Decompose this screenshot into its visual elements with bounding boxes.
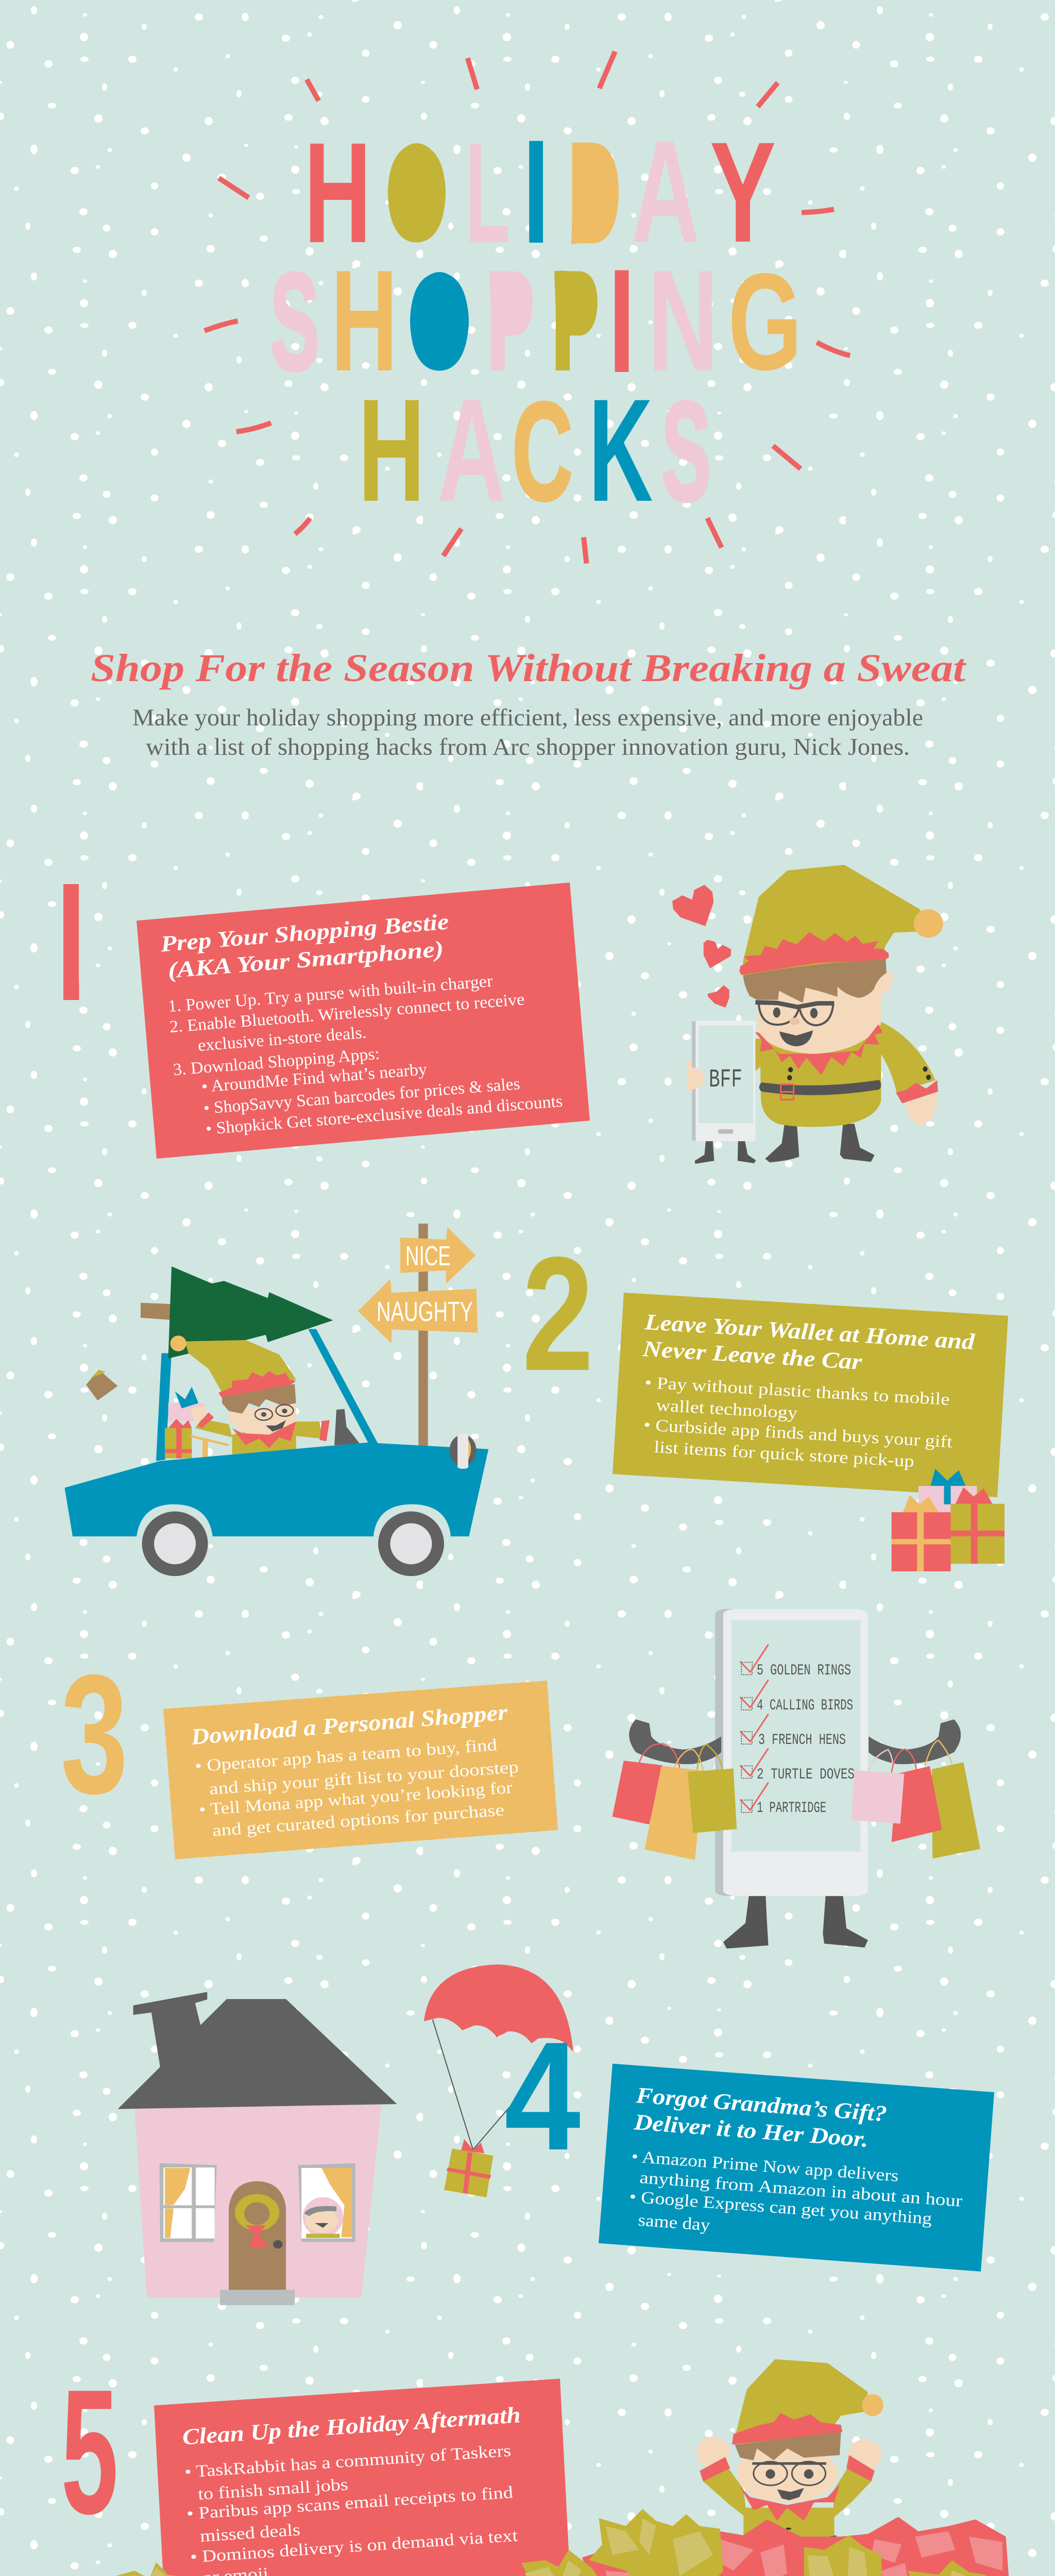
panel: step 1: Prep Your Shopping Bestie	[159, 909, 450, 957]
number 5: 5	[61, 2352, 118, 2551]
panel: step 1: 2. Enable Bluetooth. Wirelessly connect to receive	[169, 990, 525, 1037]
panel: step 2: wallet technology	[656, 1396, 798, 1422]
phone label: BFF	[709, 1065, 742, 1095]
panel: step 5: • Dominos delivery is on demand via text	[190, 2527, 518, 2567]
title: D	[567, 111, 622, 274]
icon: hearts	[672, 885, 731, 1008]
panel: step 1: • Shopkick Get store-exclusive deals and discounts	[205, 1092, 563, 1139]
panel: step 2: Never Leave the Car	[641, 1336, 863, 1375]
confetti pile with elf	[94, 2359, 1009, 2576]
icon: house	[118, 1992, 397, 2305]
sign text: NICE	[405, 1241, 451, 1272]
panel: step 4: Deliver it to Her Door.	[633, 2109, 870, 2152]
panel: step 1: (AKA Your Smartphone)	[167, 936, 445, 983]
sign text: NAUGHTY	[377, 1296, 473, 1327]
panel: step 3: and ship your gift list to your doorstep	[209, 1758, 519, 1799]
icon: olive paper clumps	[505, 2509, 987, 2576]
checklist text: 3 FRENCH HENS	[758, 1732, 846, 1749]
panel: step 2: Leave Your Wallet at Home and	[643, 1309, 976, 1354]
intro text: with a list of shopping hacks from Arc shopper innovation guru, Nick Jones.	[146, 734, 910, 760]
panel: step 4: • Amazon Prime Now app delivers	[631, 2147, 899, 2185]
title: N	[648, 240, 719, 401]
panel: step 5: • TaskRabbit has a community of Taskers	[184, 2442, 512, 2482]
panel: step 5: missed deals	[199, 2521, 301, 2546]
icon: car body	[64, 1443, 488, 1536]
title: O	[385, 116, 449, 270]
title: I	[523, 109, 550, 275]
number 3: 3	[60, 1639, 128, 1829]
panel: step 4: anything from Amazon in about an hour	[639, 2168, 963, 2211]
panel: step 2	[612, 1293, 1008, 1497]
title: S	[661, 374, 711, 530]
title: O	[407, 245, 472, 399]
panel: step 3: and get curated options for purchase	[212, 1801, 505, 1840]
title: S	[270, 245, 319, 399]
title: K	[589, 368, 653, 532]
panel: step 1: • AroundMe Find what’s nearby	[201, 1060, 428, 1096]
car scene	[64, 1224, 488, 1576]
panel: step 4: same day	[637, 2211, 711, 2235]
icon: left crumpled paper	[94, 2562, 192, 2576]
panel: step 3: Download a Personal Shopper	[190, 1700, 509, 1750]
title: H	[358, 369, 425, 532]
panel: step 4: • Google Express can get you anything	[628, 2188, 932, 2228]
panel: step 3: • Tell Mona app what you’re looking for	[198, 1778, 513, 1819]
title	[270, 109, 802, 532]
panel: step 3: • Operator app has a team to buy, find	[194, 1736, 498, 1776]
panel: step 1: 1. Power Up. Try a purse with built-in charger	[167, 972, 494, 1016]
title: H	[331, 240, 398, 401]
panel: step 1: 3. Download Shopping Apps:	[173, 1045, 380, 1079]
icon: gift stack	[892, 1469, 1005, 1571]
panel: step 1: • ShopSavvy Scan barcodes for prices & sales	[203, 1075, 521, 1118]
panel: step 3	[163, 1681, 558, 1859]
elf body	[743, 2507, 835, 2555]
panel: step 2: list items for quick store pick-up	[654, 1438, 915, 1471]
title: Y	[710, 112, 776, 272]
subtitle: Shop For the Season Without Breaking a Sweat	[91, 647, 967, 690]
house with parachute	[118, 1964, 573, 2305]
intro text	[132, 704, 923, 760]
checklist text	[757, 1662, 855, 1817]
sign text	[377, 1241, 473, 1327]
title: A	[631, 110, 700, 273]
title: L	[465, 112, 510, 273]
checklist text: 5 GOLDEN RINGS	[757, 1662, 851, 1680]
checklist text: 2 TURTLE DOVES	[757, 1766, 855, 1784]
title: G	[728, 245, 802, 399]
panel: step 5: • Paribus app scans email receipts to find	[186, 2483, 514, 2523]
icon: red paper pile	[582, 2517, 1009, 2576]
panel: step 2: • Pay without plastic thanks to mobile	[644, 1374, 950, 1409]
panel: step 2: • Curbside app finds and buys your gift	[643, 1416, 953, 1451]
title: H	[304, 113, 371, 273]
icon: parachute gift	[424, 1964, 573, 2197]
checklist text: 4 CALLING BIRDS	[757, 1697, 853, 1715]
panel: step 5: Clean Up the Holiday Aftermath	[181, 2402, 521, 2450]
intro text: Make your holiday shopping more efficient, less expensive, and more enjoyable	[132, 704, 923, 731]
title: P	[551, 241, 600, 401]
title: I	[608, 239, 635, 404]
panel: step 1: exclusive in-store deals.	[197, 1023, 367, 1055]
icon: signpost	[358, 1224, 478, 1447]
elf with phone	[672, 865, 943, 1164]
title: A	[437, 368, 506, 532]
panel: step 4: Forgot Grandma’s Gift?	[635, 2082, 888, 2127]
number 2: 2	[522, 1224, 594, 1405]
number 4: 4	[504, 2010, 582, 2183]
title: P	[486, 241, 535, 401]
panel: step 1	[137, 883, 590, 1159]
title rays	[205, 52, 850, 564]
panel: step 4	[599, 2064, 994, 2272]
phone character with shopping bags	[612, 1609, 980, 1948]
panel: step 5: to finish small jobs	[197, 2476, 349, 2504]
number 1: 1	[62, 848, 80, 1036]
checklist text: 1 PARTRIDGE	[757, 1800, 826, 1817]
title: C	[512, 373, 573, 530]
panel: step 5	[154, 2379, 570, 2576]
